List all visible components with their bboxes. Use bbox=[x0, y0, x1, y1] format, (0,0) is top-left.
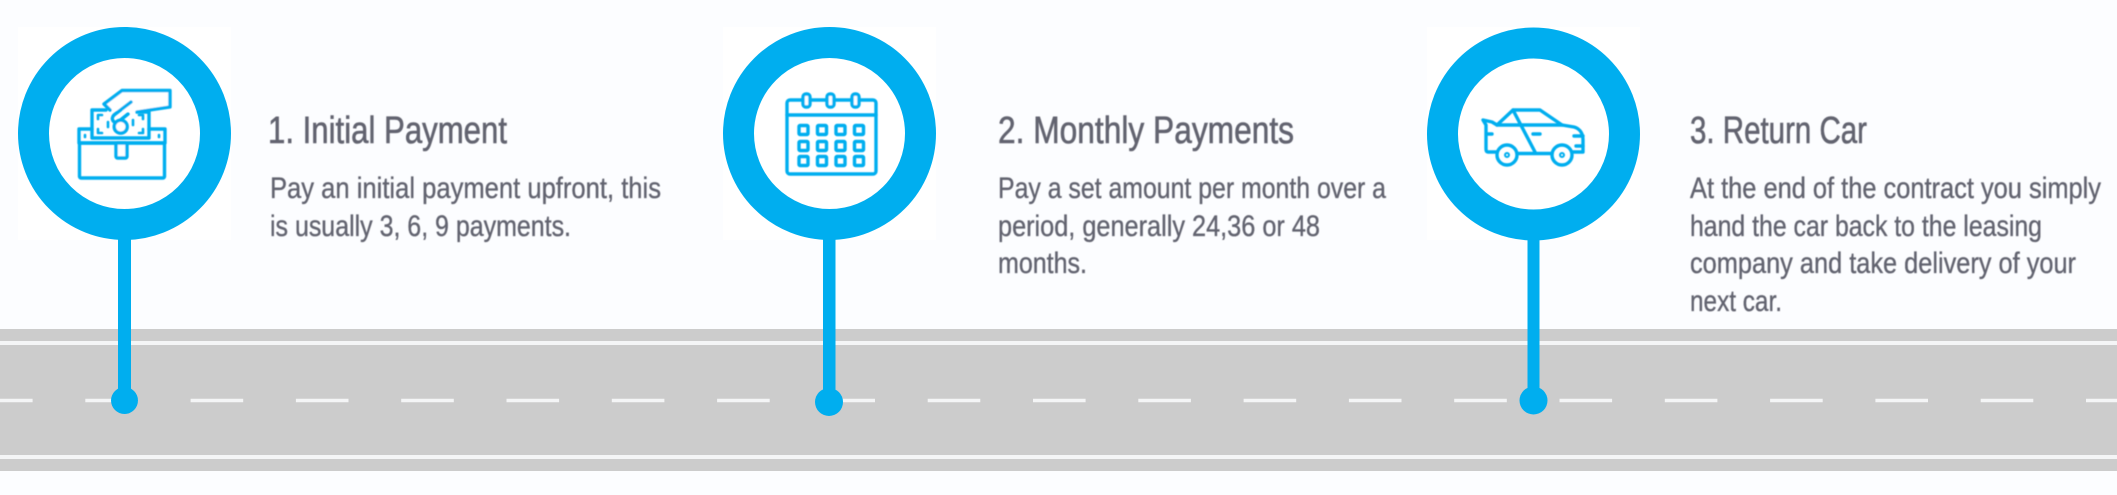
marker pin 3 bbox=[1442, 43, 1624, 414]
icon: hand putting money in wallet bbox=[79, 90, 170, 178]
marker pin 2 bbox=[738, 42, 920, 416]
description 3: hand the car back to the leasing bbox=[1690, 210, 2042, 243]
description 2 bbox=[998, 172, 1386, 280]
heading 2: 2. Monthly Payments bbox=[998, 110, 1294, 152]
heading 1: 1. Initial Payment bbox=[268, 110, 507, 152]
icon: calendar bbox=[787, 94, 876, 174]
icon: car bbox=[1483, 110, 1583, 165]
description 2: months. bbox=[998, 247, 1087, 280]
description 2: period, generally 24,36 or 48 bbox=[998, 210, 1320, 243]
step 2: monthly payments bbox=[723, 27, 1386, 416]
description 2: Pay a set amount per month over a bbox=[998, 172, 1386, 205]
description 3 bbox=[1690, 172, 2101, 318]
heading 3: 3. Return Car bbox=[1690, 110, 1867, 152]
description 1: is usually 3, 6, 9 payments. bbox=[270, 210, 571, 243]
step 1: initial payment bbox=[18, 27, 661, 414]
road bbox=[0, 329, 2117, 471]
step 3: return car bbox=[1427, 27, 2101, 414]
description 3: next car. bbox=[1690, 285, 1782, 318]
description 1: Pay an initial payment upfront, this bbox=[270, 172, 661, 205]
marker pin 1 bbox=[34, 42, 216, 414]
description 1 bbox=[270, 172, 661, 243]
